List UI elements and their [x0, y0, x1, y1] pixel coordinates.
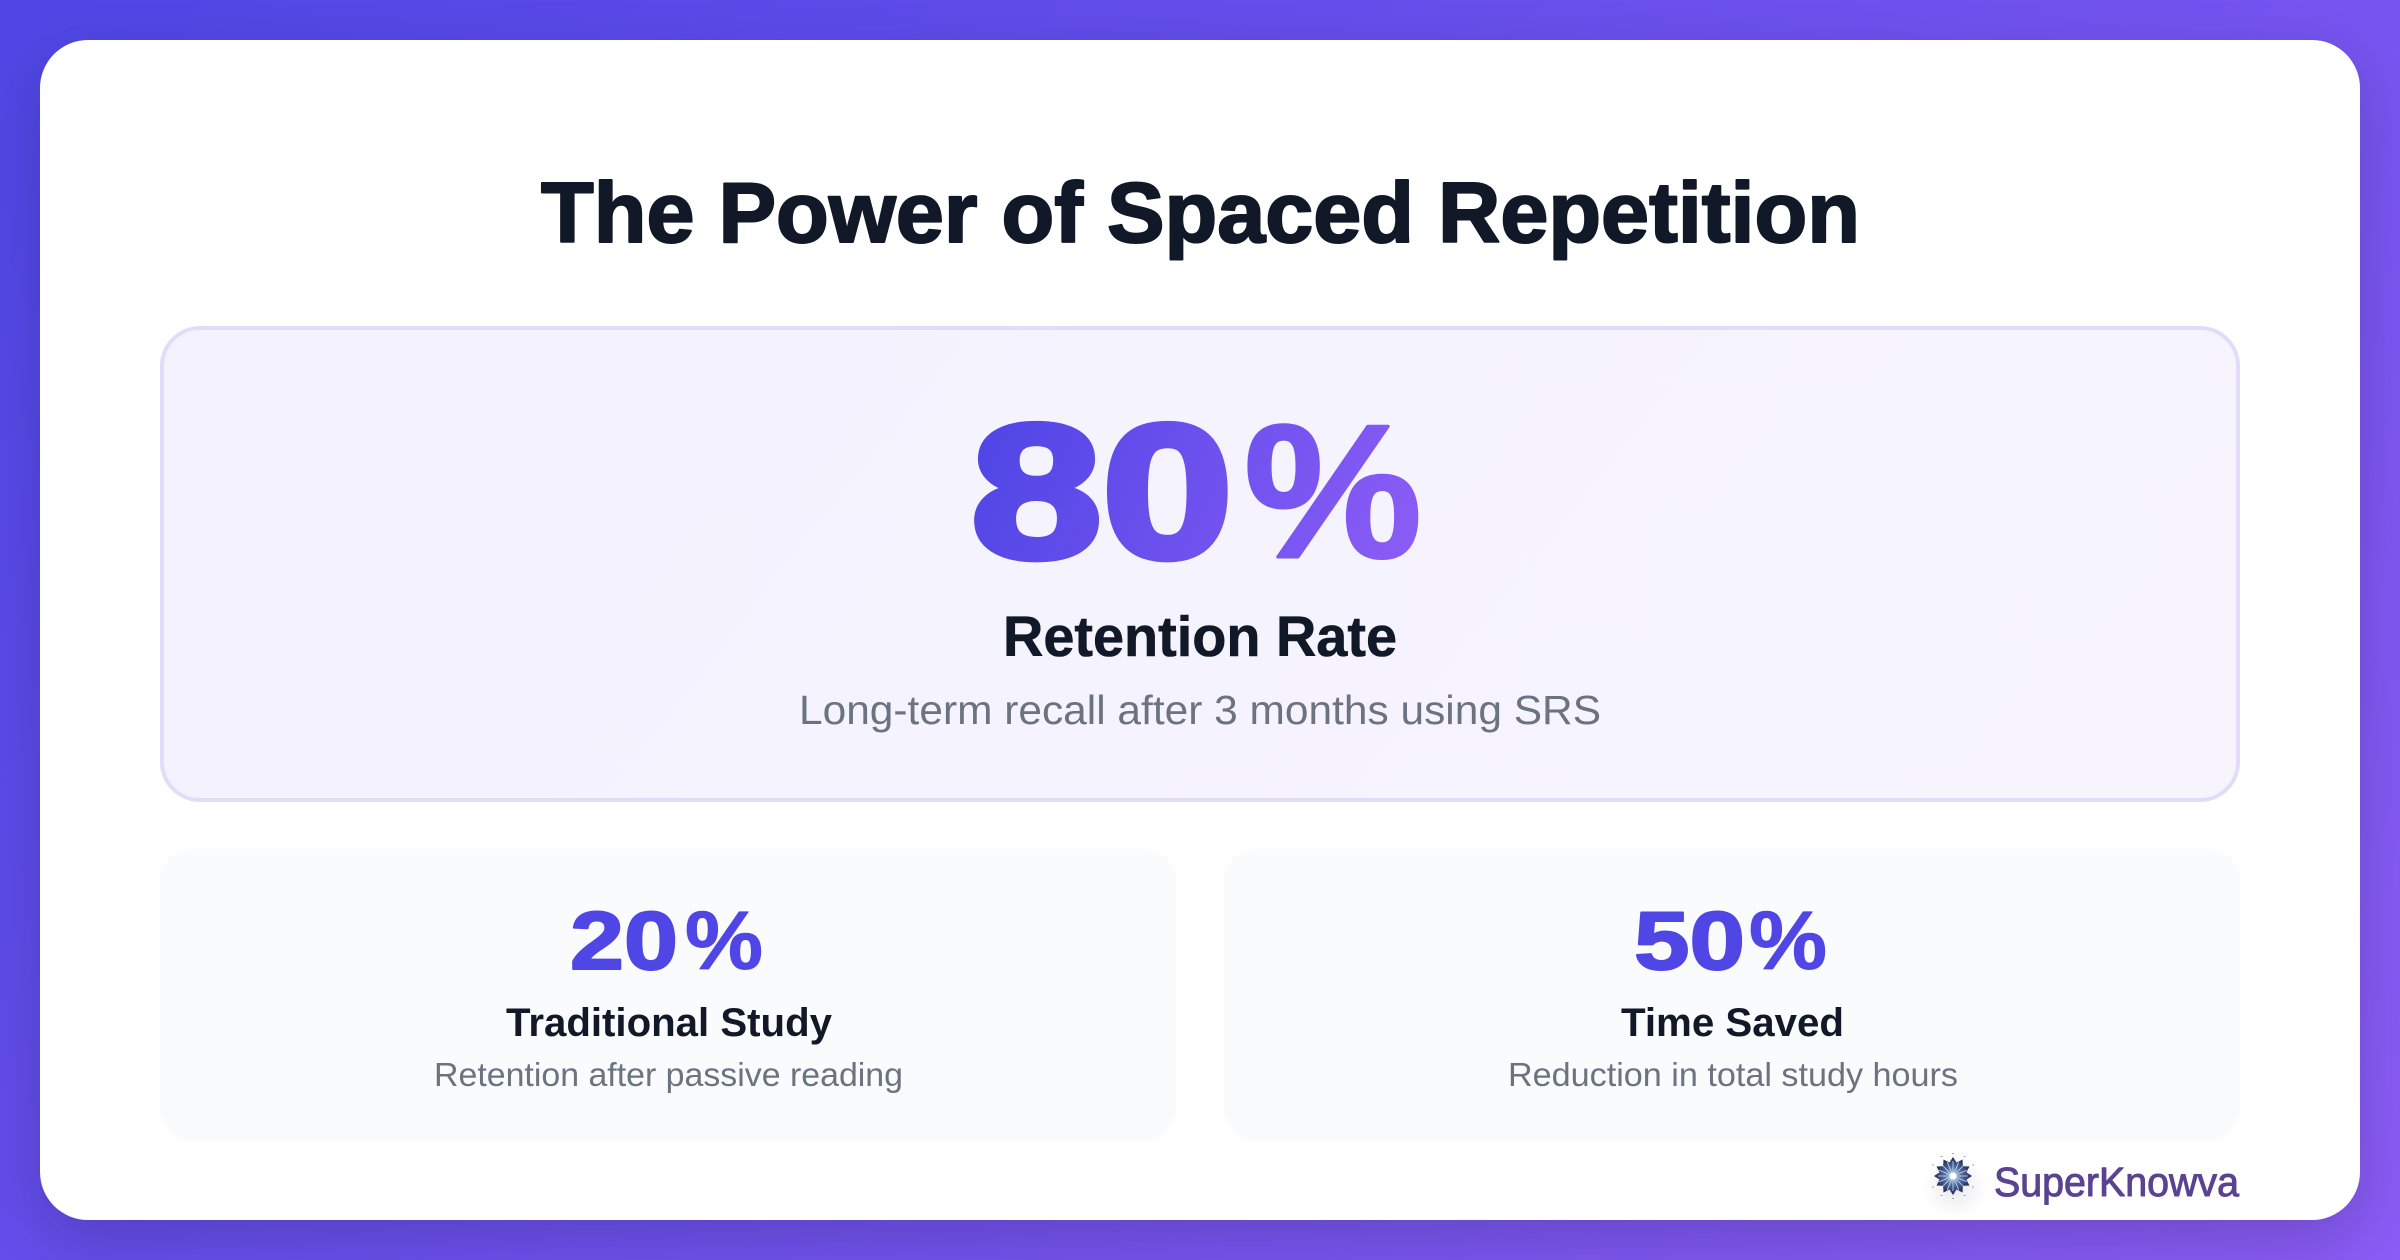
stat: 20%: % — [685, 894, 763, 987]
hero description: Long-term recall after 3 months using SRS — [799, 687, 1601, 733]
logo: SuperKnowva — [1921, 1153, 2239, 1218]
hero number: 80%: % — [1244, 386, 1422, 598]
label: traditional study: Traditional Study — [506, 1001, 833, 1045]
description: passive reading: Retention after passive reading — [434, 1056, 903, 1093]
stat: 20%: 20 — [570, 894, 678, 987]
hero number: 80%: 80 — [971, 386, 1233, 598]
stat: 50%: % — [1749, 894, 1827, 987]
panel: traditional study — [160, 849, 1176, 1141]
brand name: SuperKnowva — [1994, 1159, 2239, 1205]
icon: starburst — [1921, 1153, 1989, 1218]
panel: time saved — [1224, 849, 2240, 1141]
hero label: Retention Rate — [1003, 605, 1397, 669]
title: The Power of Spaced Repetition — [541, 166, 1860, 261]
label: time saved: Time Saved — [1621, 1001, 1844, 1045]
description: study hours: Reduction in total study hours — [1508, 1056, 1958, 1093]
stat: 50%: 50 — [1634, 894, 1745, 987]
panel: retention rate hero — [162, 328, 2238, 800]
